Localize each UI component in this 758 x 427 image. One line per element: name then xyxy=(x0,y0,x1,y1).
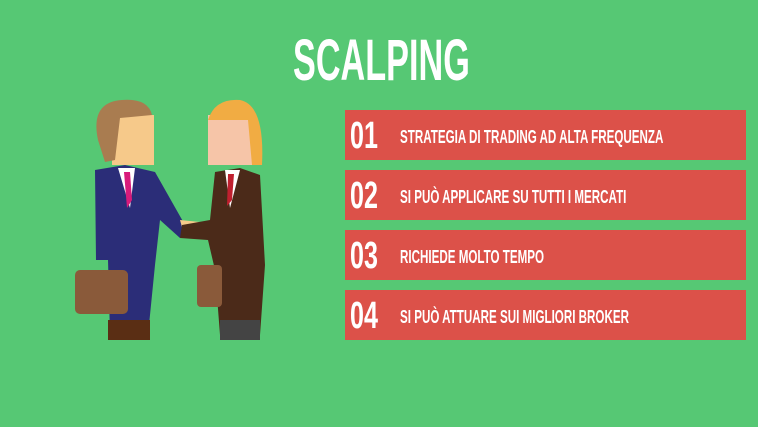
item 04 xyxy=(345,290,746,340)
item 01: 01 xyxy=(350,115,378,157)
item 04: 04 xyxy=(350,295,378,337)
illustration: businessmen handshake xyxy=(75,100,265,340)
item 04: SI PUÒ ATTUARE SUI MIGLIORI BROKER xyxy=(400,307,629,327)
item 02: SI PUÒ APPLICARE SU TUTTI I MERCATI xyxy=(400,187,626,207)
title: SCALPING xyxy=(293,28,470,93)
item 01: STRATEGIA DI TRADING AD ALTA FREQUENZA xyxy=(400,127,663,147)
item 01 xyxy=(345,110,746,160)
left man xyxy=(75,100,205,340)
right man xyxy=(180,100,265,340)
item 02: 02 xyxy=(350,175,378,217)
item 03 xyxy=(345,230,746,280)
item 02 xyxy=(345,170,746,220)
item 03: 03 xyxy=(350,235,378,277)
item 03: RICHIEDE MOLTO TEMPO xyxy=(400,247,544,267)
